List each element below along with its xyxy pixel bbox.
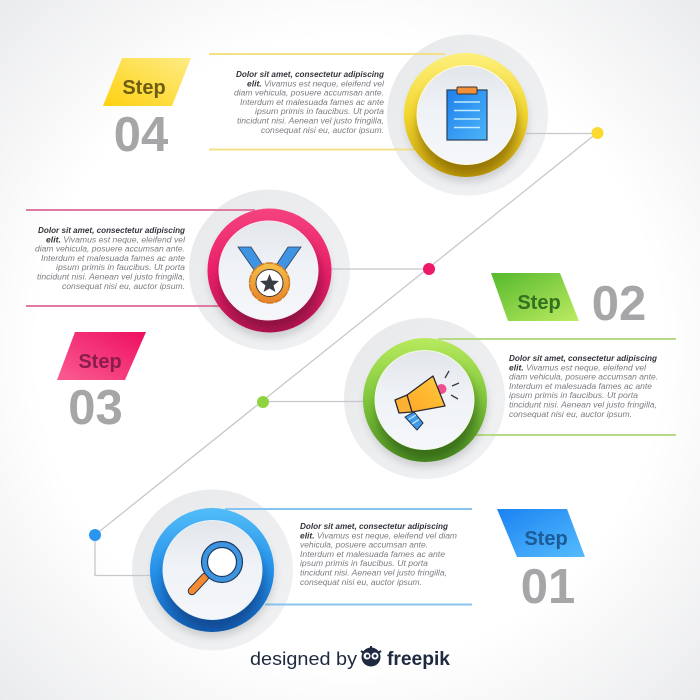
number: 03: 03 xyxy=(68,381,123,435)
text block: step 03: consequat nisi eu, auctor ipsum. xyxy=(62,281,185,291)
text block: step 03: tincidunt nisi. Aenean vel justo fringilla, xyxy=(37,272,185,282)
text block: step 04: diam vehicula, posuere accumsan ante. xyxy=(234,88,384,98)
text block: step 04: elit. Vivamus est neque, eleifend vel xyxy=(247,78,385,88)
panel: step 01 xyxy=(150,508,585,637)
number: 04: 04 xyxy=(114,108,168,162)
text block: step 02: Dolor sit amet, consectetur adipiscing xyxy=(509,353,658,363)
circle: step 02 xyxy=(363,338,487,467)
badge: step 04 xyxy=(103,58,191,106)
node: yellow dot xyxy=(592,127,604,139)
badge: step 03: Step xyxy=(78,351,122,373)
circle: step 04 xyxy=(404,53,528,182)
badge: step 02: Step xyxy=(517,292,561,314)
node: pink dot xyxy=(423,263,435,275)
text block: step 01: consequat nisi eu, auctor ipsum. xyxy=(300,577,422,587)
icon: clipboard xyxy=(447,87,487,140)
text block: step 01: elit. Vivamus est neque, eleifend vel diam xyxy=(300,530,457,540)
circle: step 03 xyxy=(208,208,332,338)
rules: step 02 xyxy=(438,339,676,435)
badge: step 01 xyxy=(497,509,585,557)
badge: step 01: Step xyxy=(524,528,568,550)
text block: step 03 xyxy=(35,225,186,291)
rules: step 01 xyxy=(225,509,472,604)
text block: step 03: elit. Vivamus est neque, eleifend vel xyxy=(46,234,186,244)
footer: designed by freepik: freepik xyxy=(387,649,450,670)
icon: freepik logo xyxy=(361,646,381,666)
panel: step 03 xyxy=(26,208,332,435)
node: green dot xyxy=(257,396,269,408)
text block: step 01 xyxy=(300,521,457,587)
panel: step 02 xyxy=(363,273,676,467)
text block: step 02: tincidunt nisi. Aenean vel justo fringilla, xyxy=(509,400,657,410)
text block: step 04: tincidunt nisi. Aenean vel justo fringilla, xyxy=(237,116,384,126)
text block: step 02: elit. Vivamus est neque, eleifend vel xyxy=(509,362,647,372)
footer: designed by freepik xyxy=(250,646,450,670)
icon: medal xyxy=(238,247,301,303)
text block: step 03: diam vehicula, posuere accumsan ante. xyxy=(35,244,185,254)
text block: step 02: consequat nisi eu, auctor ipsum. xyxy=(509,409,632,419)
text block: step 01: ipsum primis in faucibus. Ut porta xyxy=(300,558,428,568)
text block: step 03: Dolor sit amet, consectetur adipiscing xyxy=(38,225,186,235)
backing discs xyxy=(132,34,548,650)
icon: magnifier xyxy=(192,542,242,591)
text block: step 02: Interdum et malesuada fames ac ante xyxy=(509,381,652,391)
icon: megaphone xyxy=(395,371,459,430)
text block: step 01: Dolor sit amet, consectetur adipiscing xyxy=(300,521,449,531)
badge: step 02 xyxy=(491,273,579,321)
number: 02: 02 xyxy=(592,277,646,331)
rules: step 03 xyxy=(26,210,255,306)
circle: step 01 xyxy=(150,508,274,637)
text block: step 04: consequat nisi eu, auctor ipsum. xyxy=(261,125,384,135)
text block: step 03: Interdum et malesuada fames ac ante xyxy=(41,253,185,263)
text block: step 04 xyxy=(234,69,385,135)
text block: step 03: ipsum primis in faucibus. Ut porta xyxy=(56,262,185,272)
badge: step 04: Step xyxy=(122,77,166,99)
footer: designed by freepik: designed by xyxy=(250,648,358,669)
text block: step 02: ipsum primis in faucibus. Ut porta xyxy=(509,390,638,400)
text block: step 04: Interdum et malesuada fames ac ante xyxy=(240,97,384,107)
timeline connector: diagonal and leader lines xyxy=(95,133,597,576)
node: blue dot xyxy=(89,529,101,541)
text block: step 02 xyxy=(509,353,658,419)
text block: step 04: Dolor sit amet, consectetur adipiscing xyxy=(236,69,385,79)
text block: step 02: diam vehicula, posuere accumsan ante. xyxy=(509,372,658,382)
text block: step 01: vehicula, posuere accumsan ante. xyxy=(300,540,428,550)
text block: step 01: tincidunt nisi. Aenean vel justo fringilla, xyxy=(300,568,447,578)
rules: step 04 xyxy=(209,54,445,150)
text block: step 04: ipsum primis in faucibus. Ut porta xyxy=(255,106,384,116)
badge: step 03 xyxy=(57,332,146,380)
panel: step 04 xyxy=(103,53,528,182)
number: 01: 01 xyxy=(521,560,575,614)
text block: step 01: Interdum et malesuada fames ac ante xyxy=(300,549,445,559)
